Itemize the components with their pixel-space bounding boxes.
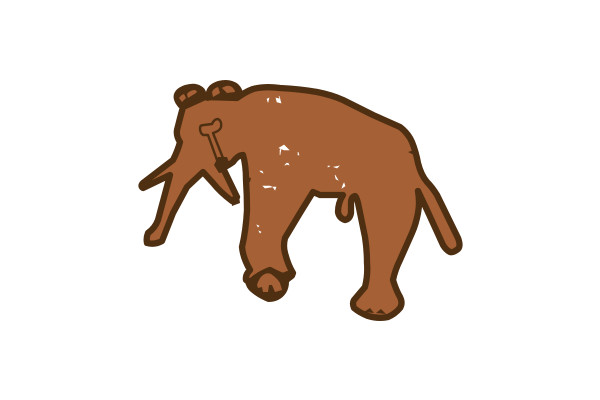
body silhouette with dark outline xyxy=(142,87,460,318)
back foot toe bumps xyxy=(364,308,386,314)
white specks xyxy=(257,96,345,233)
front paw toes xyxy=(257,273,282,292)
illustration: brown mammoth xyxy=(142,80,460,318)
tusk bone xyxy=(200,119,223,160)
outline nubs xyxy=(240,150,414,283)
ear inner patches xyxy=(179,86,235,102)
ears dark shape xyxy=(174,80,242,108)
front paw xyxy=(245,268,295,302)
tusk base blob xyxy=(214,157,230,173)
trunk branch tip xyxy=(231,196,240,206)
